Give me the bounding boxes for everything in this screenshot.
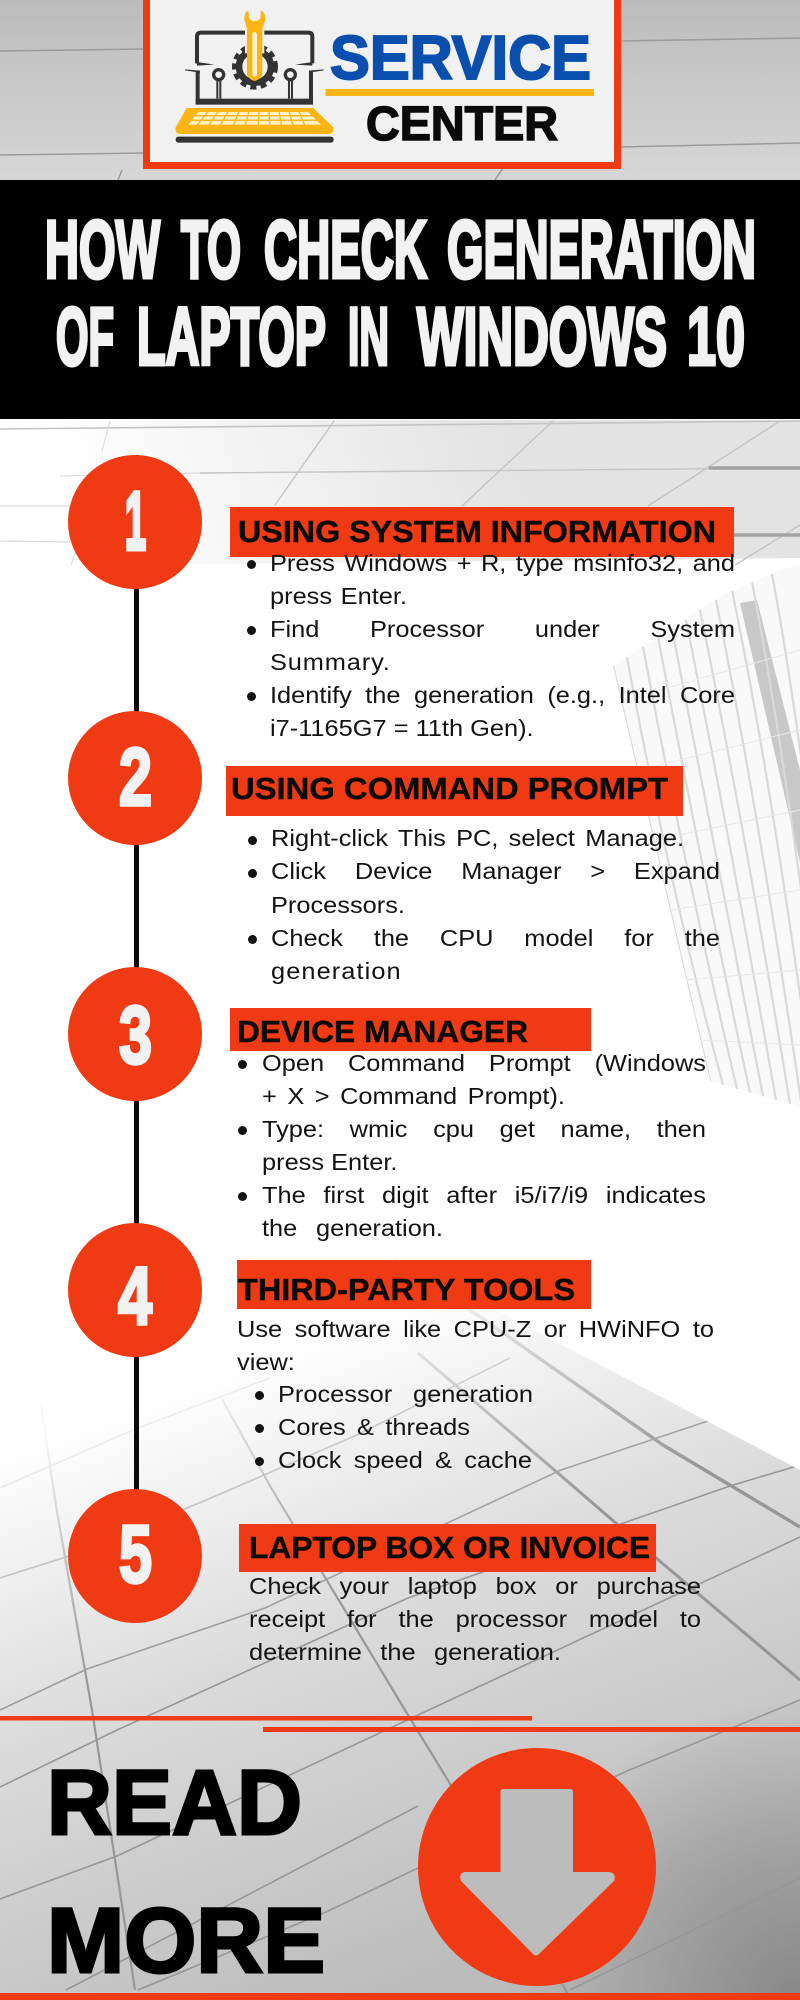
heading: [239, 1524, 656, 1572]
title text: IN: [348, 292, 389, 382]
bullet list: Identify the generation (e.g., Intel Core: [270, 682, 735, 708]
intro text: Use software like CPU-Z or HWiNFO to: [237, 1316, 714, 1342]
heading: [230, 1008, 591, 1051]
bullet list: Check the CPU model for the: [271, 925, 720, 951]
bullet list: press Enter.: [262, 1149, 397, 1175]
bullet list: Cores & threads: [278, 1414, 469, 1440]
heading: [230, 507, 734, 557]
title text: CHECK: [264, 204, 427, 296]
floor lines: [0, 1256, 800, 1996]
step number 5: [68, 1489, 202, 1623]
title text: TO: [181, 204, 241, 296]
bullet list: Press Windows + R, type msinfo32, and: [270, 550, 735, 576]
icon: down arrow in circle: [418, 1748, 656, 1986]
step number 4: 4: [118, 1251, 152, 1342]
bullet list: press Enter.: [270, 583, 407, 609]
bullet list: [247, 550, 735, 741]
bullet list: Open Command Prompt (Windows: [262, 1050, 706, 1076]
logo rule: [326, 89, 594, 96]
panel: step 3 device manager: [230, 1008, 706, 1241]
step number 3: 3: [119, 990, 152, 1081]
icon: laptop with wrench and gear: [175, 11, 334, 143]
building facade at right: [613, 565, 800, 1120]
logo text: center: CENTER: [366, 98, 558, 151]
title text: LAPTOP: [137, 292, 326, 382]
bullet list: the generation.: [262, 1215, 443, 1241]
step number 1: [68, 455, 202, 589]
intro text: view:: [237, 1349, 295, 1375]
bullet list: [248, 825, 720, 984]
heading: [226, 766, 683, 816]
read more text: MORE: [47, 1890, 325, 1992]
bullet list: Right-click This PC, select Manage.: [271, 825, 684, 851]
heading: USING COMMAND PROMPT: [231, 771, 668, 806]
body text: receipt for the processor model to: [248, 1606, 700, 1632]
title text: OF: [56, 292, 114, 382]
step number 2: 2: [119, 732, 152, 823]
bullet list: Processor generation: [278, 1381, 532, 1407]
bullet list: Click Device Manager > Expand: [271, 858, 720, 884]
bullet list: i7-1165G7 = 11th Gen).: [270, 715, 534, 741]
bullet list: [255, 1381, 532, 1473]
heading: LAPTOP BOX OR INVOICE: [249, 1530, 650, 1565]
panel: step 5 laptop box or invoice: [239, 1524, 700, 1665]
heading: [237, 1260, 591, 1309]
bullet list: + X > Command Prompt).: [262, 1083, 565, 1109]
step number 3: [68, 967, 202, 1101]
bullet list: Processors.: [271, 892, 405, 918]
intro text: [237, 1316, 714, 1375]
heading: THIRD-PARTY TOOLS: [238, 1272, 575, 1307]
logo text: service: SERVICE: [330, 24, 591, 93]
body text: Check your laptop box or purchase: [248, 1573, 700, 1599]
panel: step 2 using command prompt: [226, 766, 720, 984]
bullet list: Clock speed & cache: [278, 1447, 531, 1473]
title text: HOW: [45, 204, 160, 296]
body text: [248, 1573, 700, 1665]
step number 5: 5: [119, 1509, 152, 1600]
bullet list: Summary.: [270, 649, 391, 675]
heading: DEVICE MANAGER: [237, 1014, 528, 1049]
panel: step 4 third-party tools: [237, 1260, 714, 1473]
read more text: [47, 1752, 325, 1992]
logo panel: [146, 0, 618, 166]
body text: determine the generation.: [248, 1639, 560, 1665]
bullet list: [238, 1050, 706, 1241]
heading: USING SYSTEM INFORMATION: [238, 514, 716, 549]
title text: [45, 204, 756, 382]
bullet list: generation: [271, 958, 402, 984]
step number 1: 1: [125, 476, 146, 567]
step number 4: [68, 1223, 202, 1357]
bullet list: Find Processor under System: [270, 616, 735, 642]
read more text: READ: [47, 1752, 302, 1854]
title text: 10: [687, 292, 745, 382]
step number 2: [68, 711, 202, 845]
bullet list: Type: wmic cpu get name, then: [262, 1116, 706, 1142]
bullet list: The first digit after i5/i7/i9 indicates: [262, 1182, 706, 1208]
panel: step 1 using system information: [230, 507, 735, 741]
